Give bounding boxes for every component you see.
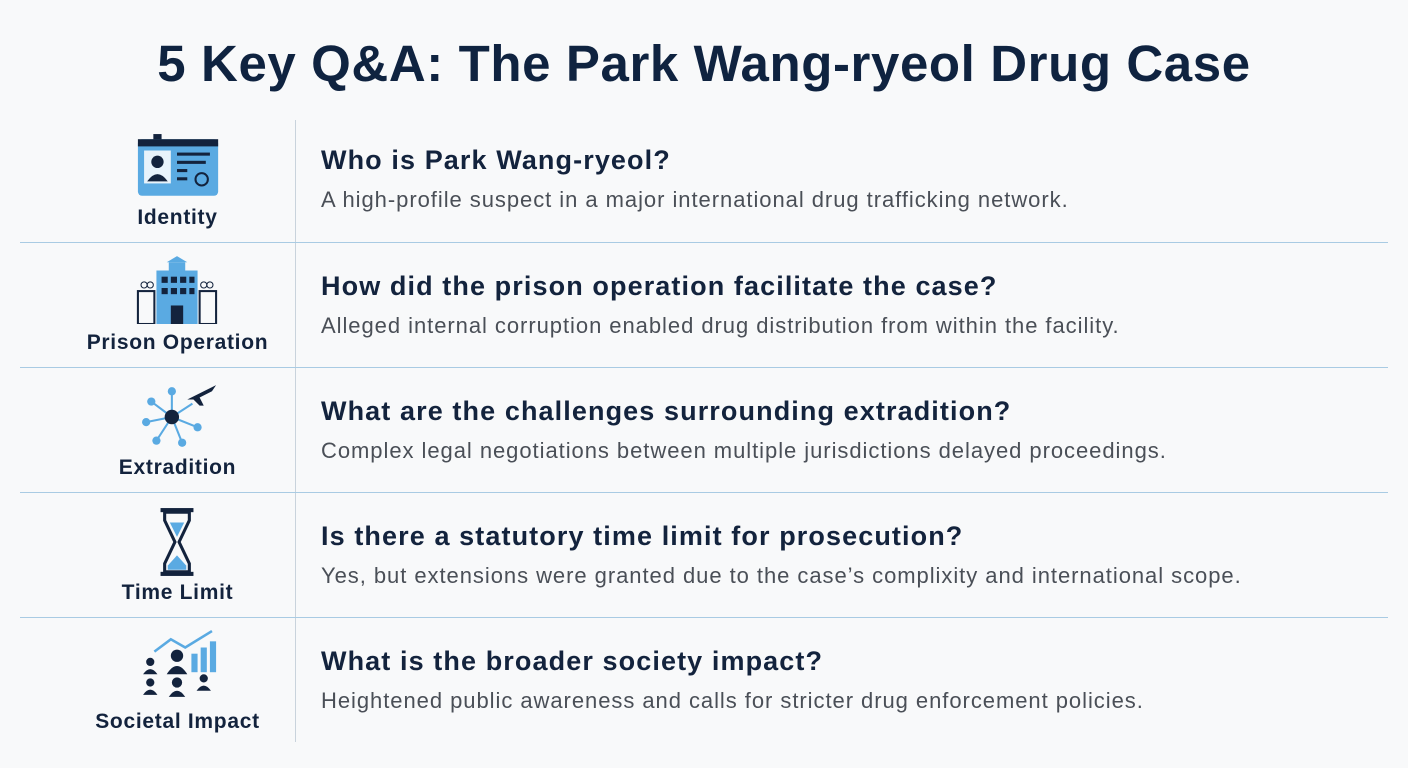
icon: network and plane xyxy=(142,385,216,447)
row: extradition xyxy=(119,385,1167,479)
answer 3: Complex legal negotiations between multiple jurisdictions delayed proceedings. xyxy=(321,438,1167,463)
row: societal impact xyxy=(95,630,1144,733)
question 1: Who is Park Wang-ryeol? xyxy=(321,145,671,175)
answer 2: Alleged internal corruption enabled drug distribution from within the facility. xyxy=(321,313,1120,338)
answer 1: A high-profile suspect in a major international drug trafficking network. xyxy=(321,187,1069,212)
row: time limit xyxy=(122,508,1242,604)
icon: people and chart xyxy=(143,630,216,697)
label: societal impact: Societal Impact xyxy=(95,710,260,733)
answer 4: Yes, but extensions were granted due to the case’s complixity and international scope. xyxy=(321,563,1242,588)
icon: hourglass xyxy=(160,508,194,576)
row: prison operation xyxy=(87,256,1120,354)
label: extradition: Extradition xyxy=(119,456,236,479)
question 3: What are the challenges surrounding extradition? xyxy=(321,396,1011,426)
answer 5: Heightened public awareness and calls for stricter drug enforcement policies. xyxy=(321,688,1144,713)
icon: prison xyxy=(136,256,218,324)
label: time limit: Time Limit xyxy=(122,581,233,604)
question 2: How did the prison operation facilitate the case? xyxy=(321,271,998,301)
icon: id card xyxy=(138,134,218,196)
title: 5 Key Q&A: The Park Wang-ryeol Drug Case xyxy=(157,35,1251,92)
question 4: Is there a statutory time limit for prosecution? xyxy=(321,521,963,551)
label: identity: Identity xyxy=(137,206,218,229)
label: prison operation: Prison Operation xyxy=(87,331,268,354)
row: identity xyxy=(137,134,1069,229)
question 5: What is the broader society impact? xyxy=(321,646,823,676)
